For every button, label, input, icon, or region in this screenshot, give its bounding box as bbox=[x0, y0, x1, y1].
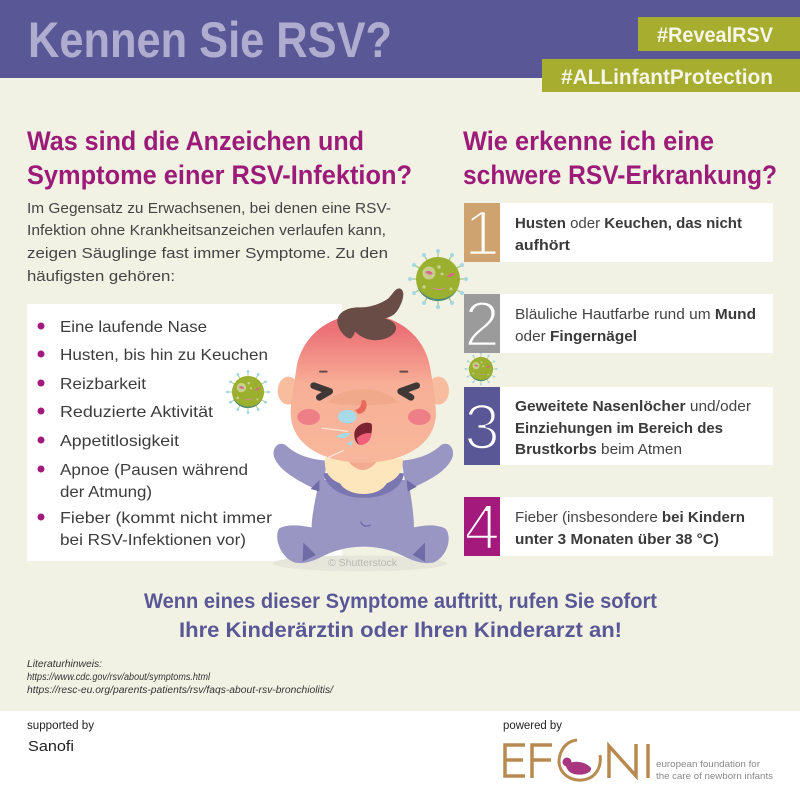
credit: shutterstock: © Shutterstock bbox=[328, 557, 398, 569]
panel: step 1: Husten oder Keuchen, das nicht bbox=[515, 215, 742, 232]
right heading bbox=[463, 126, 777, 190]
left heading: Symptome einer RSV-Infektion? bbox=[27, 160, 412, 190]
panel: step 2: Bläuliche Hautfarbe rund um Mund bbox=[515, 306, 756, 323]
illustration: sick baby bbox=[273, 288, 453, 571]
panel: step 3: 3 bbox=[464, 391, 500, 463]
panel: step 3 bbox=[464, 387, 773, 465]
intro paragraph: zeigen Säuglinge fast immer Symptome. Zu den bbox=[27, 245, 388, 262]
panel: step 4: 4 bbox=[464, 491, 500, 563]
bullet list: Reduzierte Aktivität bbox=[60, 404, 214, 421]
right heading: schwere RSV-Erkrankung? bbox=[463, 160, 777, 190]
logo tagline: european foundation for bbox=[656, 759, 760, 770]
bullet list: Husten, bis hin zu Keuchen bbox=[60, 347, 268, 364]
references: https://resc-eu.org/parents-patients/rsv/faqs-about-rsv-bronchiolitis/ bbox=[27, 685, 334, 696]
call to action: Ihre Kinderärztin oder Ihren Kinderarzt an! bbox=[179, 619, 622, 642]
bullet list bbox=[38, 319, 273, 549]
intro paragraph bbox=[27, 200, 391, 285]
header band bbox=[0, 0, 800, 78]
panel: step 2 bbox=[464, 288, 773, 360]
bullet list: Reizbarkeit bbox=[60, 376, 147, 393]
bullet list: Appetitlosigkeit bbox=[60, 433, 180, 450]
footer: supported by: Sanofi bbox=[28, 738, 74, 755]
references bbox=[27, 659, 334, 696]
icon: virus small bbox=[464, 352, 498, 386]
panel: step 3: Brustkorbs beim Atmen bbox=[515, 441, 682, 458]
bullet list: Apnoe (Pausen während bbox=[60, 462, 248, 479]
right heading: Wie erkenne ich eine bbox=[463, 126, 714, 156]
footer: supported by bbox=[27, 720, 94, 755]
panel: step 3: Einziehungen im Bereich des bbox=[515, 420, 723, 437]
title: Kennen Sie RSV? bbox=[28, 12, 392, 68]
panel: step 1: 1 bbox=[464, 197, 500, 269]
panel: symptom list bbox=[27, 304, 342, 561]
bullet list: bei RSV-Infektionen vor) bbox=[60, 532, 246, 549]
panel: step 1 bbox=[464, 197, 773, 269]
left heading bbox=[27, 126, 412, 190]
logo tagline bbox=[656, 759, 773, 782]
bullet list: der Atmung) bbox=[60, 484, 152, 501]
logo tagline: the care of newborn infants bbox=[656, 771, 773, 782]
panel: step 3: Geweitete Nasenlöcher und/oder bbox=[515, 398, 751, 415]
footer: powered by: powered by bbox=[503, 720, 562, 732]
panel: step 4 bbox=[464, 491, 773, 563]
intro paragraph: Infektion ohne Krankheitsanzeichen verlaufen kann, bbox=[27, 222, 386, 239]
panel: step 2: 2 bbox=[464, 288, 500, 360]
logo: EFCNI bbox=[505, 740, 773, 782]
hashtag: RevealRSV bbox=[638, 17, 800, 51]
panel: step 2: oder Fingernägel bbox=[515, 328, 637, 345]
bullet list: Fieber (kommt nicht immer bbox=[60, 510, 273, 527]
panel: step 4: unter 3 Monaten über 38 °C) bbox=[515, 531, 719, 548]
call to action: Wenn eines dieser Symptome auftritt, rufen Sie sofort bbox=[144, 590, 657, 613]
footer: supported by: supported by bbox=[27, 720, 94, 732]
panel: step 4: Fieber (insbesondere bei Kindern bbox=[515, 509, 745, 526]
hashtag: ALLinfantProtection: #ALLinfantProtection bbox=[561, 66, 773, 89]
left heading: Was sind die Anzeichen und bbox=[27, 126, 364, 156]
references: https://www.cdc.gov/rsv/about/symptoms.html bbox=[27, 672, 211, 683]
icon: virus top bbox=[408, 249, 468, 309]
icon: virus left bbox=[226, 370, 270, 414]
panel: step 1: aufhört bbox=[515, 237, 570, 254]
call to action bbox=[144, 590, 657, 642]
hashtag: ALLinfantProtection bbox=[542, 59, 800, 92]
references: Literaturhinweis: bbox=[27, 659, 102, 670]
bullet list: Eine laufende Nase bbox=[60, 319, 207, 336]
intro paragraph: Im Gegensatz zu Erwachsenen, bei denen eine RSV- bbox=[27, 200, 391, 217]
intro paragraph: häufigsten gehören: bbox=[27, 268, 175, 285]
hashtag: RevealRSV: #RevealRSV bbox=[657, 24, 773, 47]
